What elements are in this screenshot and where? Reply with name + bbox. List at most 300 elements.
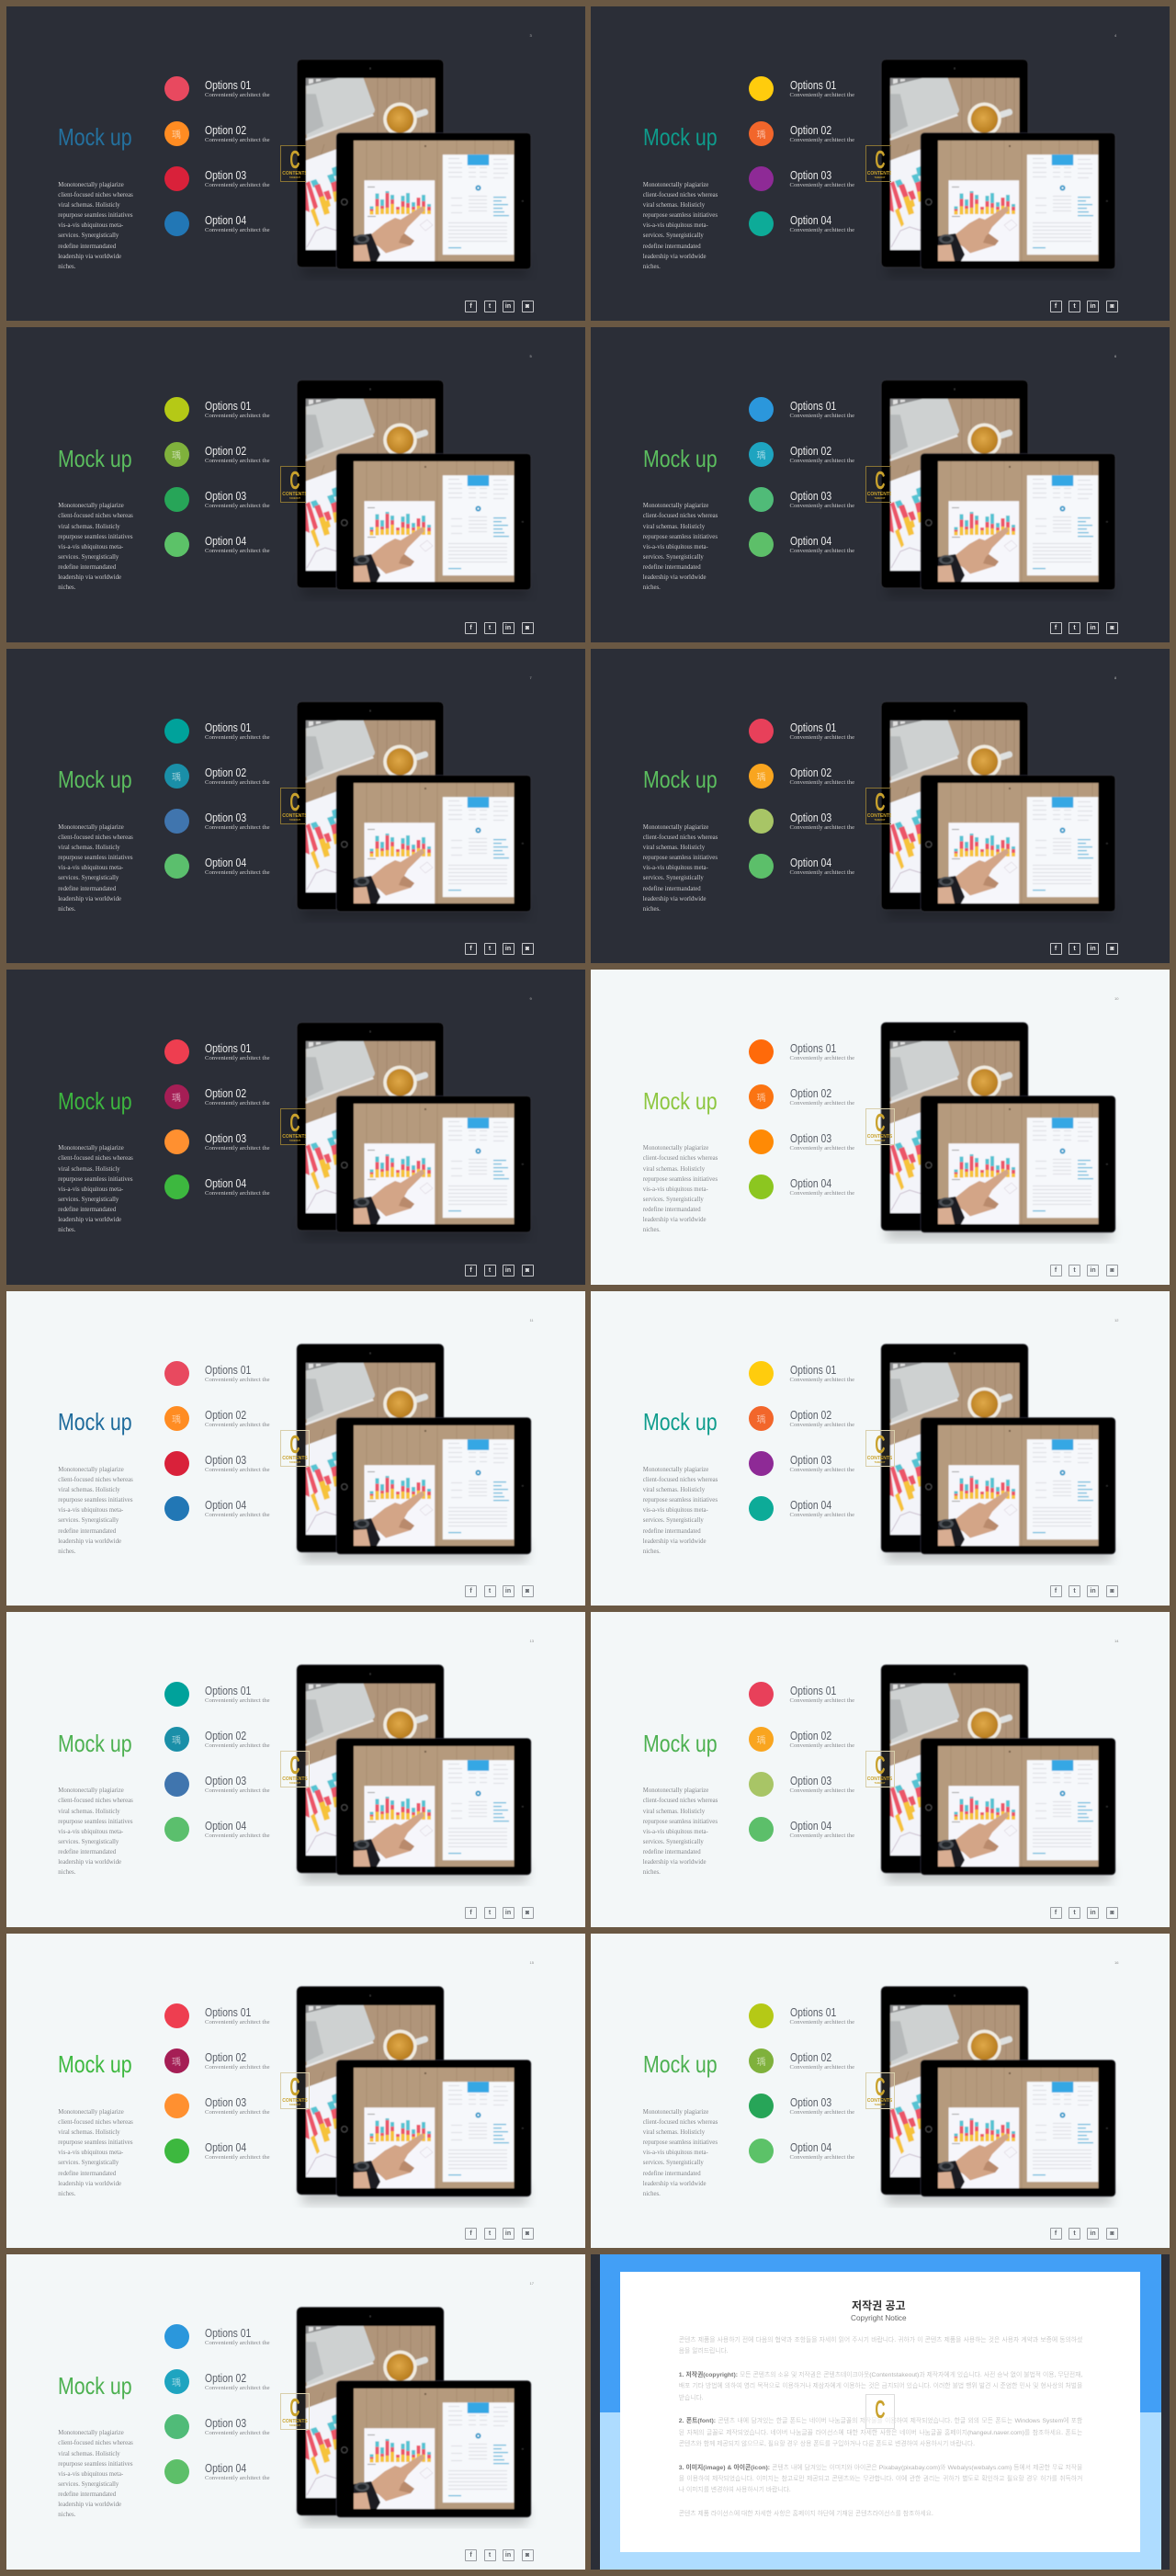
- tablets mockup: [297, 702, 531, 915]
- option 01: [164, 2324, 292, 2349]
- icon: instagram: ◙: [526, 625, 529, 631]
- panel: dark mock up slide warm: [591, 649, 1170, 963]
- icon: twitter: t: [489, 303, 491, 310]
- icon: linkedin: in: [505, 625, 511, 631]
- option 01: Conveniently architect the: [790, 413, 854, 419]
- text block: Monotonectally plagiarize: [58, 1787, 124, 1794]
- icon: facebook: [465, 301, 477, 312]
- option 02: Conveniently architect the: [790, 779, 854, 786]
- page number: 9: [529, 996, 532, 1001]
- icon: twitter: [1069, 1585, 1080, 1597]
- option 03: [164, 166, 270, 191]
- icon: linkedin: in: [1090, 1910, 1096, 1916]
- option 03: [749, 1772, 877, 1797]
- option 03: Conveniently architect the: [790, 2109, 854, 2116]
- text block: viral schemas. Holisticly: [58, 2450, 120, 2457]
- text block: vis-a-vis ubiquitous meta-: [643, 1829, 708, 1835]
- icon: instagram: [1106, 2228, 1118, 2240]
- text block: leadership via worldwide: [58, 896, 121, 902]
- text block: client-focused niches whereas: [643, 192, 718, 199]
- panel: dark mock up slide sky: [591, 327, 1170, 641]
- option 03: Conveniently architect the: [205, 1787, 270, 1794]
- option 04: Conveniently architect the: [205, 1512, 270, 1518]
- logo badge: CONTENTS: [867, 2097, 892, 2103]
- option 04: Conveniently architect the: [790, 548, 854, 554]
- option 03: [164, 2414, 292, 2439]
- text block: viral schemas. Holisticly: [643, 1809, 705, 1814]
- option 02: 瑀: [757, 768, 766, 783]
- icon: facebook: f: [1055, 1588, 1057, 1594]
- text block: leadership via worldwide: [643, 574, 706, 581]
- icon: instagram: [522, 2549, 533, 2561]
- panel: dark mock up slide green: [6, 970, 584, 1285]
- option 04: [749, 2138, 877, 2163]
- text block: Monotonectally plagiarize: [643, 1145, 708, 1152]
- page number: 17: [529, 2281, 534, 2286]
- text block: niches.: [643, 264, 661, 270]
- logo badge: CONTENTS: [867, 1134, 892, 1140]
- text block: services. Synergistically: [643, 1839, 704, 1845]
- tablets mockup: [881, 59, 1115, 274]
- icon: facebook: [1049, 1907, 1062, 1919]
- option 02: Option 02: [205, 1729, 246, 1742]
- heading: Mock up: [643, 1087, 717, 1115]
- option 04: Option 04: [790, 1498, 831, 1512]
- icon: twitter: [483, 2549, 496, 2561]
- option 01: Options 01: [205, 721, 251, 734]
- option 01: [164, 2003, 292, 2027]
- icon: facebook: [1049, 2228, 1062, 2240]
- icon: twitter: [483, 1907, 496, 1919]
- heading: Mock up: [58, 2372, 132, 2400]
- text block: client-focused niches whereas: [58, 834, 133, 841]
- icon: facebook: f: [469, 1588, 472, 1594]
- text block: services. Synergistically: [643, 554, 704, 561]
- option 03: Option 03: [790, 2095, 831, 2109]
- text block: Monotonectally plagiarize: [58, 182, 124, 188]
- icon: twitter: t: [1073, 625, 1076, 631]
- text block: services. Synergistically: [643, 875, 704, 881]
- option 03: Conveniently architect the: [205, 1145, 270, 1152]
- heading: Mock up: [643, 445, 717, 472]
- icon: linkedin: in: [505, 2552, 511, 2559]
- option 04: [749, 532, 854, 557]
- option 03: Option 03: [205, 2095, 246, 2109]
- icon: twitter: t: [1073, 1910, 1076, 1916]
- option 01: [749, 1039, 877, 1064]
- icon: twitter: t: [1073, 946, 1076, 952]
- text block: services. Synergistically: [58, 2481, 119, 2488]
- logo badge: C: [289, 2071, 300, 2101]
- icon: instagram: [522, 622, 533, 634]
- icon: linkedin: [502, 1585, 514, 1597]
- page number: 3: [529, 33, 532, 37]
- option 04: Option 04: [205, 2461, 246, 2475]
- option 01: Conveniently architect the: [205, 1697, 270, 1704]
- text block: [58, 2428, 150, 2521]
- icon: instagram: ◙: [1110, 1588, 1114, 1594]
- text block: vis-a-vis ubiquitous meta-: [58, 544, 123, 550]
- icon: twitter: [1069, 301, 1080, 312]
- text block: redefine intermandated: [643, 1207, 701, 1213]
- page number: 16: [1114, 1959, 1118, 1965]
- option 02: [164, 1406, 292, 1430]
- heading: Mock up: [643, 766, 717, 793]
- text block: [58, 1145, 133, 1233]
- option 04: Option 04: [205, 1498, 246, 1512]
- option 02: [164, 2369, 292, 2394]
- icon: facebook: f: [1055, 303, 1057, 310]
- icon: instagram: ◙: [1110, 1910, 1114, 1916]
- option 01: Conveniently architect the: [790, 92, 854, 98]
- option 01: [164, 76, 270, 101]
- logo badge: TAKEOUT: [289, 497, 300, 500]
- text block: Monotonectally plagiarize: [643, 182, 708, 188]
- text block: repurpose seamless initiatives: [58, 855, 132, 861]
- option 04: Conveniently architect the: [205, 2154, 270, 2161]
- icon: twitter: [483, 943, 496, 955]
- option 02: Conveniently architect the: [205, 458, 270, 464]
- option 02: Conveniently architect the: [790, 458, 854, 464]
- option 02: [749, 764, 854, 789]
- text block: leadership via worldwide: [643, 254, 706, 260]
- icon: instagram: ◙: [1110, 1267, 1114, 1274]
- option 01: Conveniently architect the: [205, 92, 270, 98]
- option 03: [164, 809, 270, 834]
- text block: repurpose seamless initiatives: [58, 2461, 132, 2468]
- text block: [643, 503, 718, 591]
- option 02: [749, 2048, 877, 2073]
- text block: niches.: [643, 1549, 661, 1555]
- text block: viral schemas. Holisticly: [58, 2129, 120, 2136]
- icon: twitter: [1069, 1265, 1080, 1277]
- logo badge: C: [289, 787, 300, 816]
- heading: Mock up: [58, 1087, 132, 1115]
- logo badge: TAKEOUT: [289, 2103, 300, 2106]
- option 03: [749, 1450, 877, 1476]
- white notice card: [620, 2272, 1140, 2552]
- logo badge: [865, 2394, 895, 2429]
- icon: twitter: t: [1073, 2230, 1076, 2237]
- text block: redefine intermandated: [643, 244, 701, 250]
- icon: facebook: [1049, 943, 1062, 955]
- logo badge: [280, 2393, 310, 2430]
- icon: twitter: t: [489, 2552, 491, 2559]
- text block: repurpose seamless initiatives: [58, 1497, 132, 1504]
- icon: linkedin: in: [505, 1588, 511, 1594]
- option 02: Option 02: [205, 1408, 246, 1422]
- icon: facebook: f: [469, 625, 472, 631]
- tablets mockup: [6, 970, 584, 1285]
- option 02: [164, 442, 270, 467]
- icon: facebook: [465, 1907, 477, 1919]
- text block: redefine intermandated: [58, 1528, 116, 1535]
- option 03: [749, 809, 854, 834]
- text block: client-focused niches whereas: [643, 1798, 718, 1804]
- option 02: 瑀: [172, 448, 181, 461]
- option 02: Option 02: [790, 1408, 831, 1422]
- text block: niches.: [643, 906, 661, 913]
- text block: services. Synergistically: [643, 1197, 704, 1203]
- option 03: Conveniently architect the: [790, 1145, 854, 1152]
- icon: twitter: t: [489, 625, 491, 631]
- heading: Mock up: [58, 123, 132, 151]
- option 01: Conveniently architect the: [790, 1377, 854, 1383]
- text block: Monotonectally plagiarize: [58, 1145, 124, 1152]
- text block: [643, 824, 718, 913]
- option 02: 瑀: [172, 2375, 181, 2389]
- icon: twitter: [1069, 2228, 1080, 2240]
- icon: linkedin: in: [505, 2230, 511, 2237]
- text block: niches.: [643, 2191, 661, 2197]
- option 04: Conveniently architect the: [205, 2475, 270, 2481]
- logo badge: C: [875, 145, 885, 173]
- text block: viral schemas. Holisticly: [58, 1165, 120, 1173]
- option 04: [749, 211, 854, 236]
- option 01: Conveniently architect the: [205, 413, 270, 419]
- text block: services. Synergistically: [58, 1517, 119, 1524]
- option 02: [749, 1406, 877, 1430]
- icon: instagram: [522, 2228, 533, 2240]
- option 02: 瑀: [757, 2053, 766, 2068]
- text block: viral schemas. Holisticly: [643, 1487, 705, 1493]
- option 03: Conveniently architect the: [790, 1787, 854, 1794]
- logo badge: C: [875, 2395, 886, 2423]
- logo badge: [865, 1108, 895, 1145]
- option 04: Option 04: [790, 856, 831, 869]
- icon: facebook: f: [469, 303, 472, 310]
- page number: 11: [529, 1318, 534, 1322]
- option 03: Option 03: [790, 1453, 831, 1467]
- option 02: [164, 1084, 270, 1109]
- icon: twitter: [1069, 622, 1080, 634]
- text block: [58, 1786, 150, 1878]
- option 04: Conveniently architect the: [205, 548, 270, 554]
- text block: vis-a-vis ubiquitous meta-: [58, 1507, 123, 1514]
- text block: client-focused niches whereas: [58, 2119, 133, 2126]
- icon: linkedin: in: [1090, 1267, 1096, 1274]
- text block: redefine intermandated: [58, 2171, 116, 2177]
- text block: niches.: [643, 1869, 661, 1876]
- option 03: Option 03: [205, 489, 246, 503]
- text block: viral schemas. Holisticly: [58, 845, 120, 851]
- option 04: Option 04: [205, 1819, 246, 1833]
- option 01: Options 01: [205, 2005, 251, 2019]
- option 02: 瑀: [172, 1090, 181, 1104]
- option 02: 瑀: [172, 2053, 181, 2068]
- section 1 line 1: 1. 저작권(copyright): 모든 콘텐츠의 소유 및 저작권은 콘텐츠테이크아웃(Contentstakeout)과 제작자에게 있습니다. 사전 승낙 없이 불법적 이용, 무단전재,: [679, 2372, 1082, 2378]
- option 04: Conveniently architect the: [205, 227, 270, 233]
- text block: Monotonectally plagiarize: [643, 503, 708, 509]
- text block: repurpose seamless initiatives: [58, 212, 132, 219]
- text block: vis-a-vis ubiquitous meta-: [643, 544, 708, 550]
- logo badge: [865, 1751, 895, 1787]
- tablets mockup: [6, 2254, 584, 2570]
- panel: dark mock up slide teal: [591, 6, 1170, 321]
- option 03: Option 03: [205, 168, 246, 182]
- icon: linkedin: [502, 1265, 514, 1277]
- page number: 14: [1114, 1639, 1118, 1643]
- option 03: Option 03: [205, 1774, 246, 1787]
- option 04: [164, 2138, 292, 2163]
- icon: instagram: ◙: [1110, 303, 1114, 310]
- text block: [643, 1786, 735, 1878]
- text block: leadership via worldwide: [643, 1538, 706, 1545]
- text block: [58, 503, 133, 591]
- tablets mockup: [6, 1290, 584, 1606]
- page number: 13: [529, 1639, 534, 1643]
- text block: redefine intermandated: [58, 1849, 116, 1855]
- text block: Monotonectally plagiarize: [58, 2109, 124, 2116]
- icon: facebook: f: [469, 946, 472, 952]
- logo badge: C: [289, 1430, 300, 1458]
- option 01: [164, 1682, 292, 1707]
- text block: services. Synergistically: [58, 554, 119, 561]
- icon: linkedin: in: [505, 1910, 511, 1916]
- option 03: Option 03: [790, 1774, 831, 1787]
- option 04: [164, 1817, 292, 1842]
- icon: twitter: [1069, 1907, 1080, 1919]
- option 04: Option 04: [790, 1176, 831, 1190]
- option 04: Conveniently architect the: [790, 1190, 854, 1197]
- option 03: Option 03: [790, 811, 831, 824]
- option 04: Option 04: [205, 856, 246, 869]
- logo badge: C: [875, 1108, 885, 1137]
- text block: repurpose seamless initiatives: [643, 2139, 718, 2146]
- option 04: [164, 211, 270, 236]
- logo badge: [280, 1751, 310, 1787]
- tablets mockup: [6, 1612, 584, 1926]
- heading: Mock up: [643, 1408, 717, 1436]
- text block: Monotonectally plagiarize: [643, 824, 708, 831]
- option 02: Conveniently architect the: [205, 1100, 270, 1106]
- panel: light mock up slide blue: [6, 1290, 584, 1606]
- option 03: Conveniently architect the: [205, 503, 270, 509]
- icon: twitter: [483, 301, 496, 312]
- text block: redefine intermandated: [643, 886, 701, 892]
- icon: linkedin: [1087, 943, 1099, 955]
- text block: viral schemas. Holisticly: [58, 1487, 120, 1493]
- icon: linkedin: [1087, 1585, 1099, 1597]
- text block: leadership via worldwide: [58, 254, 121, 260]
- text block: redefine intermandated: [58, 1207, 116, 1213]
- icon: facebook: f: [469, 2552, 472, 2559]
- text block: Monotonectally plagiarize: [58, 2430, 124, 2436]
- text block: Monotonectally plagiarize: [643, 1787, 708, 1794]
- section 2 line 2: 된 자체의 글꼴로 제작되었습니다. 네이버 나눔글꼴 라이선스에 대한 자세한 사항은 네이버 나눔글꼴 홈페이지(hangeul.naver.com)를 참조하세요. 폰트는: [679, 2430, 1082, 2436]
- tablets mockup: [881, 380, 1115, 594]
- option 01: [164, 397, 270, 422]
- section 3 line 1: 3. 이미지(image) & 아이콘(icon): 콘텐츠 내에 담겨있는 이미지와 아이콘은 Pixabay(pixabay.com)와 Webalys(webalys.com) 등에서 제공한 무료 저작물: [679, 2465, 1082, 2471]
- icon: linkedin: in: [505, 1267, 511, 1274]
- text block: services. Synergistically: [58, 233, 119, 239]
- icon: instagram: [522, 1585, 533, 1597]
- option 02: Conveniently architect the: [790, 1742, 854, 1749]
- option 02: Option 02: [205, 123, 246, 137]
- icon: instagram: ◙: [526, 1267, 529, 1274]
- option 02: 瑀: [757, 448, 766, 461]
- logo badge: TAKEOUT: [875, 818, 885, 822]
- text block: viral schemas. Holisticly: [643, 524, 705, 529]
- notice title: 저작권 공고: [852, 2299, 906, 2312]
- text block: [643, 1143, 735, 1236]
- text block: leadership via worldwide: [643, 2181, 706, 2187]
- option 02: Option 02: [205, 2371, 246, 2385]
- icon: instagram: [522, 1907, 533, 1919]
- option 04: Option 04: [790, 534, 831, 548]
- text block: viral schemas. Holisticly: [58, 524, 120, 529]
- option 04: Option 04: [205, 213, 246, 227]
- icon: linkedin: [1087, 622, 1099, 634]
- heading: Mock up: [58, 1730, 132, 1757]
- option 03: [164, 487, 270, 512]
- option 04: Option 04: [205, 1176, 246, 1190]
- heading: Mock up: [643, 123, 717, 151]
- option 01: Options 01: [790, 721, 836, 734]
- text block: Monotonectally plagiarize: [58, 824, 124, 831]
- logo badge: CONTENTS: [282, 2419, 308, 2424]
- option 02: 瑀: [757, 1412, 766, 1424]
- text block: redefine intermandated: [643, 2171, 701, 2177]
- logo badge: [865, 2071, 895, 2108]
- option 04: [749, 854, 854, 879]
- text block: [58, 824, 133, 913]
- text block: niches.: [643, 1227, 661, 1233]
- section 3 line 2: 을 이용하여 제작되었습니다. 이미지는 참고로만 제공되고 콘텐츠와는 무관합니다. 이에 관한 권리는 귀하가 별도로 확인하고 필요할 경우 허가를 취득하거: [679, 2476, 1082, 2482]
- text block: Monotonectally plagiarize: [58, 1467, 124, 1473]
- text block: services. Synergistically: [58, 2160, 119, 2166]
- option 01: Conveniently architect the: [205, 2019, 270, 2026]
- option 01: Conveniently architect the: [790, 734, 854, 741]
- text block: Monotonectally plagiarize: [58, 503, 124, 509]
- logo badge: C: [875, 787, 885, 816]
- logo badge: TAKEOUT: [875, 176, 885, 178]
- text block: niches.: [58, 264, 75, 270]
- text block: client-focused niches whereas: [58, 513, 133, 519]
- option 03: [749, 487, 854, 512]
- icon: instagram: ◙: [526, 2230, 529, 2237]
- logo badge: TAKEOUT: [289, 1461, 300, 1463]
- option 01: [164, 719, 270, 743]
- option 02: Conveniently architect the: [790, 1100, 854, 1106]
- icon: instagram: ◙: [526, 303, 529, 310]
- icon: twitter: t: [489, 1588, 491, 1594]
- option 03: Option 03: [205, 2416, 246, 2430]
- icon: linkedin: in: [1090, 1588, 1096, 1594]
- icon: instagram: [1106, 1265, 1118, 1277]
- icon: linkedin: in: [1090, 946, 1096, 952]
- blue background band: [600, 2254, 1161, 2570]
- option 03: [749, 166, 854, 191]
- option 01: Conveniently architect the: [205, 1377, 270, 1383]
- logo badge: TAKEOUT: [875, 497, 885, 500]
- icon: instagram: [522, 1265, 533, 1277]
- text block: repurpose seamless initiatives: [643, 855, 718, 861]
- logo badge: C: [875, 2071, 885, 2101]
- logo badge: TAKEOUT: [289, 1140, 300, 1142]
- panel: dark mock up slide blue: [6, 6, 584, 321]
- panel: light mock up slide orange: [591, 970, 1170, 1285]
- option 01: Options 01: [205, 1363, 251, 1377]
- text block: redefine intermandated: [643, 564, 701, 571]
- text block: services. Synergistically: [58, 1197, 119, 1203]
- logo badge: C: [289, 1108, 300, 1137]
- text block: repurpose seamless initiatives: [643, 534, 718, 540]
- option 02: 瑀: [172, 127, 181, 140]
- option 01: [749, 76, 854, 101]
- option 02: [164, 1727, 292, 1752]
- text block: repurpose seamless initiatives: [58, 534, 132, 540]
